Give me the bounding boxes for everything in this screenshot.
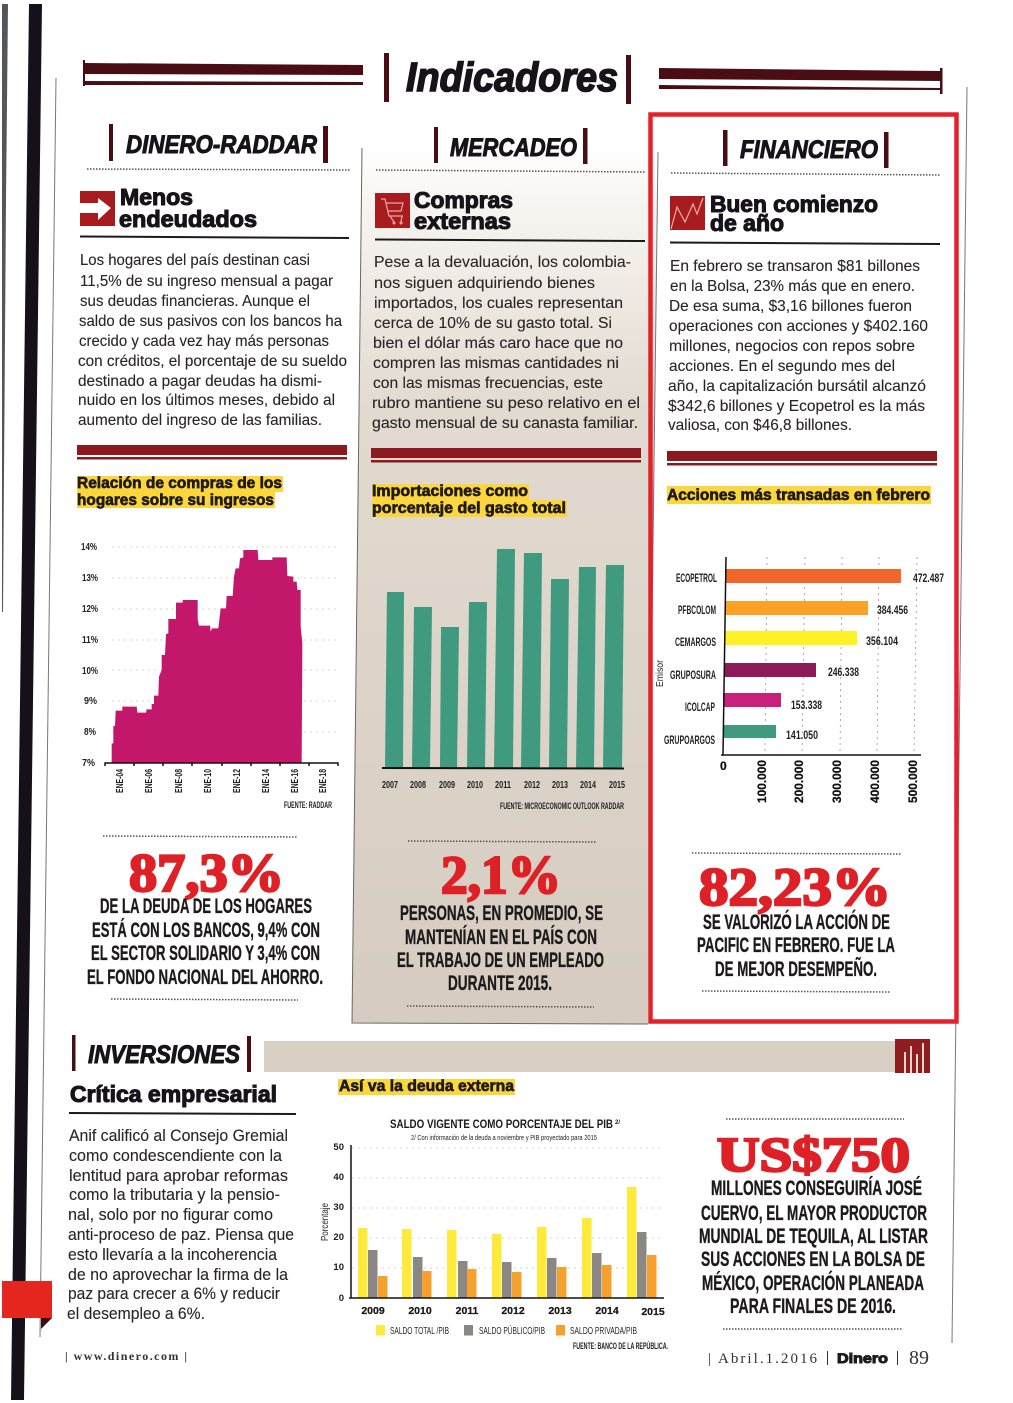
grouped bar chart: deuda externa: 10 — [333, 1262, 344, 1273]
bar chart: acciones más transadas: 200.000 — [792, 760, 806, 803]
heading: Compras externas: Compras — [414, 187, 513, 213]
bar chart: acciones más transadas: 100.000 — [755, 760, 769, 803]
panel: Inversiones — [67, 1035, 930, 1351]
section heading: DINERO-RADDAR — [87, 124, 350, 170]
grouped bar chart: deuda externa: 0 — [339, 1293, 344, 1304]
chart heading — [77, 475, 283, 509]
callout: 82,23% — [692, 853, 901, 992]
callout: 2,1%: DURANTE 2015. — [448, 972, 552, 995]
callout: 2,1%: 2,1% — [441, 845, 561, 905]
body text: sus deudas financieras. Aunque el — [80, 293, 310, 310]
grouped bar chart: deuda externa — [320, 1117, 668, 1351]
bar chart: importaciones: 2011 — [495, 779, 511, 791]
area chart: compras sobre ingresos: FUENTE: RADDAR — [284, 800, 332, 810]
heading: Buen comienzo de año: de año — [710, 210, 784, 236]
callout: US$750: US$750 — [717, 1127, 910, 1182]
area chart: compras sobre ingresos: 12% — [82, 603, 99, 615]
section heading: INVERSIONES — [72, 1035, 251, 1072]
grouped bar chart: deuda externa: 2009 — [361, 1305, 385, 1317]
area chart: compras sobre ingresos: 9% — [84, 695, 98, 707]
heading: Crítica empresarial: Crítica empresarial — [70, 1081, 277, 1107]
area chart: compras sobre ingresos: 11% — [82, 634, 99, 646]
callout: 87,3%: DE LA DEUDA DE LOS HOGARES — [100, 895, 312, 918]
panel: Dinero-Raddar — [77, 124, 350, 1000]
footer right: date, brand, page: Dinero — [837, 1350, 888, 1366]
callout: 82,23%: 82,23% — [699, 857, 891, 917]
bar chart: acciones más transadas: 472.487 — [913, 573, 944, 585]
section heading: DINERO-RADDAR: DINERO-RADDAR — [126, 131, 317, 159]
bar chart: importaciones: 2014 — [580, 779, 596, 791]
callout: 87,3%: ESTÁ CON LOS BANCOS, 9,4% CON — [92, 919, 320, 942]
bar chart: acciones más transadas: 246.338 — [828, 667, 859, 679]
footer right: date, brand, page — [708, 1347, 929, 1369]
bar chart: importaciones: FUENTE: MICROECONOMIC OUTLOOK RADDAR — [500, 801, 624, 811]
bar chart: acciones más transadas: 356.104 — [866, 636, 898, 648]
body text: compren las mismas cantidades ni — [373, 355, 619, 372]
body text: destinado a pagar deudas ha dismi- — [78, 373, 322, 390]
body text: Pese a la devaluación, los colombia- — [374, 254, 631, 271]
grouped bar chart: deuda externa: 40 — [333, 1172, 344, 1183]
icon: red bar chart — [895, 1039, 930, 1073]
grouped bar chart: deuda externa: 30 — [333, 1202, 344, 1213]
grouped bar chart: deuda externa: 2/ Con información de la deuda a noviembre y PIB proyectado para 2015 — [411, 1135, 597, 1142]
divider bar — [77, 445, 347, 460]
heading: Compras externas — [375, 187, 645, 241]
area chart: compras sobre ingresos: ENE-12 — [231, 769, 243, 793]
grouped bar chart: deuda externa: 50 — [333, 1142, 344, 1153]
chart heading: Acciones más transadas en febrero — [667, 487, 930, 504]
body text: millones, negocios con repos sobre — [669, 338, 915, 355]
body text: con las mismas frecuencias, este — [373, 375, 603, 392]
callout: 87,3%: EL FONDO NACIONAL DEL AHORRO. — [87, 966, 323, 989]
grouped bar chart: deuda externa: 2013 — [548, 1305, 572, 1317]
legend — [376, 1324, 637, 1337]
heading: Menos endeudados: Menos — [120, 184, 193, 210]
section heading: FINANCIERO — [671, 130, 941, 175]
bar chart: acciones más transadas: 141.050 — [786, 730, 818, 742]
body text: operaciones con acciones y $402.160 — [669, 318, 928, 335]
callout: 82,23%: DE MEJOR DESEMPEÑO. — [715, 958, 877, 981]
body text: anti-proceso de paz. Piensa que — [68, 1226, 294, 1244]
body text — [78, 252, 347, 429]
bar chart: importaciones: 2010 — [467, 779, 483, 791]
red highlight frame — [650, 114, 956, 1022]
body text: en la Bolsa, 23% más que en enero. — [670, 278, 915, 295]
area chart: compras sobre ingresos: ENE-10 — [202, 769, 214, 793]
area chart: compras sobre ingresos: ENE-18 — [317, 769, 329, 793]
heading: Buen comienzo de año: Buen comienzo — [710, 191, 878, 217]
body text — [668, 258, 928, 434]
callout: 87,3%: 87,3% — [129, 843, 284, 903]
bar chart: importaciones: 2007 — [382, 779, 398, 791]
icon: red arrow — [80, 191, 115, 226]
body text: cerca de 10% de su gasto total. Si — [374, 315, 612, 332]
body text: Los hogares del país destinan casi — [80, 252, 310, 269]
bar chart: acciones más transadas: 0 — [720, 759, 727, 773]
divider bar — [371, 448, 641, 462]
body text: gasto mensual de su canasta familiar. — [372, 415, 638, 432]
grouped bar chart: deuda externa: 2/ — [615, 1120, 620, 1126]
body text: $342,6 billones y Ecopetrol es la más — [668, 398, 925, 415]
bar chart: acciones más transadas: GRUPOARGOS — [664, 735, 715, 747]
bar chart: acciones más transadas: CEMARGOS — [675, 637, 716, 649]
bar chart: importaciones: 2013 — [552, 779, 568, 791]
panel: Financiero — [655, 130, 944, 992]
area chart: compras sobre ingresos: 14% — [81, 541, 98, 553]
body text: En febrero se transaron $81 billones — [670, 258, 920, 275]
area chart: compras sobre ingresos: 10% — [82, 665, 99, 677]
body text — [372, 254, 640, 432]
grouped bar chart: deuda externa: 2015 — [641, 1306, 665, 1318]
body text: como condescendiente con la — [69, 1147, 283, 1165]
beige header band — [264, 1041, 897, 1072]
body text: 11,5% de su ingreso mensual a pagar — [80, 273, 334, 290]
grouped bar chart: deuda externa: 20 — [333, 1232, 344, 1243]
area chart: compras sobre ingresos: ENE-06 — [143, 769, 155, 793]
area chart: compras sobre ingresos: ENE-08 — [173, 769, 185, 793]
area chart: compras sobre ingresos: ENE-16 — [289, 769, 301, 793]
icon: stock line — [670, 196, 705, 230]
bar chart: acciones más transadas: 153.338 — [791, 700, 822, 712]
panel: Mercadeo — [371, 127, 645, 1007]
chart heading: hogares sobre su ingresos — [77, 492, 274, 509]
body text: saldo de sus pasivos con los bancos ha — [79, 313, 342, 330]
chart heading: Importaciones como — [372, 483, 528, 500]
footer left: website: | www.dinero.com | — [65, 1349, 187, 1363]
grouped bar chart: deuda externa: 2012 — [501, 1305, 525, 1317]
body text: con créditos, el porcentaje de su sueldo — [78, 353, 347, 370]
callout: 87,3%: EL SECTOR SOLIDARIO Y 3,4% CON — [91, 942, 320, 965]
legend: SALDO PRIVADA/PIB — [570, 1326, 637, 1337]
callout: 82,23%: PACIFIC EN FEBRERO. FUE LA — [697, 934, 895, 957]
section heading: MERCADEO: MERCADEO — [450, 134, 577, 162]
bar chart: acciones más transadas: 300.000 — [830, 760, 844, 803]
section heading: MERCADEO — [376, 127, 645, 172]
middle column beige background — [352, 148, 658, 1024]
area chart: compras sobre ingresos: ENE-14 — [260, 769, 272, 793]
bar chart: acciones más transadas: PFBCOLOM — [678, 605, 716, 617]
callout: 2,1%: EL TRABAJO DE UN EMPLEADO — [397, 949, 604, 972]
area chart: compras sobre ingresos: 13% — [82, 572, 99, 584]
body text: aumento del ingreso de las familias. — [78, 412, 322, 429]
area chart: compras sobre ingresos: ENE-04 — [114, 769, 126, 793]
body text: el desempleo a 6%. — [67, 1305, 205, 1323]
area chart: compras sobre ingresos: 8% — [84, 726, 97, 738]
section heading: INVERSIONES: INVERSIONES — [88, 1041, 240, 1069]
bar chart: acciones más transadas: Emisor — [655, 659, 666, 687]
heading: Buen comienzo de año — [670, 191, 940, 244]
bar chart: importaciones: 2008 — [410, 779, 426, 791]
bar chart: importaciones: 2015 — [609, 779, 625, 791]
grouped bar chart: deuda externa: Porcentaje — [320, 1203, 331, 1241]
icon: red bookmark — [2, 1281, 52, 1329]
body text: importados, los cuales representan — [374, 295, 623, 312]
body text: rubro mantiene su peso relativo en el — [372, 395, 640, 412]
legend: SALDO TOTAL /PIB — [390, 1326, 449, 1337]
body text: nal, solo por no figurar como — [68, 1206, 273, 1224]
grouped bar chart: deuda externa: 2011 — [456, 1305, 479, 1317]
body text: bien el dólar más caro hace que no — [373, 335, 623, 352]
body text — [67, 1127, 294, 1323]
body text: nuido en los últimos meses, debido al — [78, 392, 335, 409]
body text: de no aprovechar la firma de la — [68, 1266, 289, 1284]
callout: 2,1% — [397, 841, 604, 1007]
grouped bar chart: deuda externa: SALDO VIGENTE COMO PORCENTAJE DEL PIB — [390, 1117, 613, 1131]
body text: lentitud para aprobar reformas — [69, 1167, 288, 1185]
body text: esto llevaría a la incoherencia — [68, 1246, 278, 1264]
footer right: date, brand, page: 89 — [909, 1347, 929, 1369]
bar chart: acciones más transadas: ICOLCAP — [685, 702, 715, 714]
bar chart: acciones más transadas — [655, 557, 944, 803]
grouped bar chart: deuda externa: FUENTE: BANCO DE LA REPÚBLICA. — [573, 1340, 668, 1351]
body text: nos siguen adquiriendo bienes — [374, 275, 595, 292]
legend: SALDO PÚBLICO/PIB — [479, 1324, 545, 1337]
chart heading: Relación de compras de los — [77, 475, 282, 492]
body text: paz para crecer a 6% y reducir — [68, 1285, 280, 1303]
body text: año, la capitalización bursátil alcanzó — [668, 378, 926, 395]
chart heading: porcentaje del gasto total — [372, 500, 566, 517]
grouped bar chart: deuda externa: 2010 — [408, 1305, 432, 1317]
callout: 2,1%: MANTENÍAN EN EL PAÍS CON — [405, 926, 597, 949]
body text: Anif calificó al Consejo Gremial — [69, 1127, 288, 1145]
callout: US$750: PARA FINALES DE 2016. — [730, 1295, 896, 1318]
area chart: compras sobre ingresos — [81, 541, 338, 810]
body text: De esa suma, $3,16 billones fueron — [669, 298, 912, 315]
bar chart: acciones más transadas: ECOPETROL — [676, 573, 717, 585]
body text: crecido y cada vez hay más personas — [79, 333, 329, 350]
body text: como la tributaria y la pensio- — [69, 1186, 280, 1204]
title: Indicadores — [83, 53, 942, 104]
bar chart: acciones más transadas: 500.000 — [906, 760, 920, 803]
heading: Menos endeudados — [80, 184, 349, 238]
heading: Compras externas: externas — [414, 208, 511, 234]
icon: shopping cart — [375, 193, 410, 228]
callout: 87,3% — [87, 836, 323, 1000]
body text: acciones. En el segundo mes del — [669, 358, 895, 375]
title: Indicadores: Indicadores — [406, 54, 618, 100]
grouped bar chart: deuda externa: 2014 — [595, 1305, 619, 1317]
footer right: date, brand, page: | Abril.1.2016 — [708, 1351, 818, 1367]
heading: Menos endeudados: endeudados — [119, 206, 257, 232]
callout: 2,1%: PERSONAS, EN PROMEDIO, SE — [400, 902, 603, 925]
area chart: compras sobre ingresos: 7% — [82, 757, 96, 769]
bar chart: importaciones: 2012 — [524, 779, 540, 791]
bar chart: acciones más transadas: GRUPOSURA — [670, 670, 716, 682]
callout: US$750 — [699, 1119, 928, 1329]
bar chart: acciones más transadas: 400.000 — [868, 760, 882, 803]
callout: 82,23%: SE VALORIZÓ LA ACCIÓN DE — [703, 910, 890, 934]
bar chart: acciones más transadas: 384.456 — [877, 605, 908, 617]
body text: valiosa, con $46,8 billones. — [668, 417, 852, 434]
chart heading: Así va la deuda externa — [339, 1078, 514, 1095]
section heading: FINANCIERO: FINANCIERO — [740, 136, 878, 164]
bar chart: importaciones — [382, 549, 625, 811]
divider bar — [667, 451, 937, 466]
bar chart: importaciones: 2009 — [439, 779, 455, 791]
chart heading — [372, 483, 567, 517]
